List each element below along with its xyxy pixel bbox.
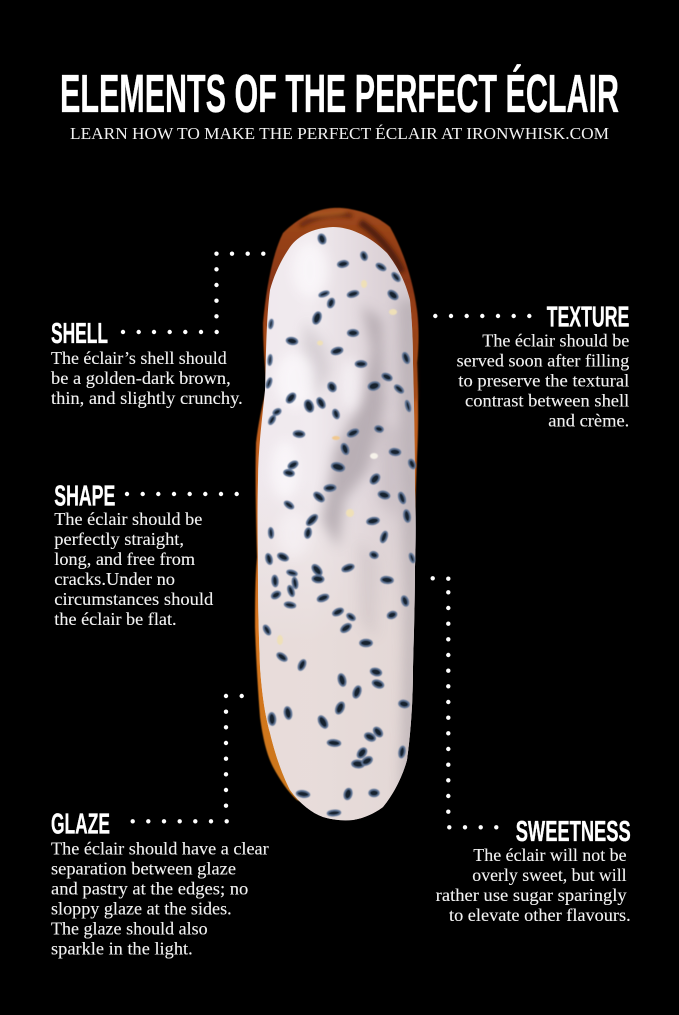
text: glaze description: The glaze should also [51, 918, 208, 938]
éclair glaze [258, 227, 416, 820]
panel: shape [54, 481, 213, 629]
text: shell description: thin, and slightly crunchy. [51, 388, 243, 408]
text: texture description [457, 331, 629, 431]
text: shell description [51, 348, 243, 408]
text: sweetness description: The éclair will not be [473, 845, 627, 865]
heading: shape: SHAPE [54, 481, 115, 513]
pale sesame flecks [277, 280, 397, 645]
dotted connector: glaze [130, 694, 244, 824]
text: shape description [54, 509, 213, 629]
shell crust texture [300, 212, 415, 400]
panel: sweetness [436, 816, 631, 925]
text: shell description: The éclair’s shell should [51, 348, 227, 368]
text: sweetness description: to elevate other flavours. [449, 905, 631, 925]
subtitle: LEARN HOW TO MAKE THE PERFECT ÉCLAIR AT IRONWHISK.COM [70, 124, 609, 143]
text: glaze description: sparkle in the light. [51, 938, 193, 958]
dotted connector: sweetness [430, 576, 498, 830]
text: shape description: The éclair should be [54, 509, 202, 529]
text: texture description: The éclair should be [482, 331, 629, 351]
text: shape description: circumstances should [54, 589, 213, 609]
text: glaze description: separation between glaze [51, 858, 236, 878]
heading: shell: SHELL [51, 318, 108, 350]
éclair illustration [250, 208, 425, 830]
dotted connector: texture [433, 314, 532, 318]
text: texture description: to preserve the textural [458, 371, 629, 391]
panel: glaze [51, 808, 269, 958]
text: shape description: cracks.Under no [54, 569, 175, 589]
panel: texture [457, 301, 629, 431]
text: texture description: served soon after filling [457, 351, 629, 371]
heading: glaze: GLAZE [51, 808, 110, 840]
text: glaze description: and pastry at the edges; no [51, 878, 248, 898]
text: sweetness description: rather use sugar sparingly [436, 885, 627, 905]
text: glaze description: The éclair should have a clear [51, 838, 269, 858]
éclair shell [255, 208, 418, 815]
dotted connector: shape [125, 492, 239, 496]
heading: texture: TEXTURE [547, 301, 629, 333]
sesame seeds [262, 233, 416, 816]
text: glaze description: sloppy glaze at the sides. [51, 898, 232, 918]
text: shape description: the éclair be flat. [54, 609, 177, 629]
glaze shadows [302, 300, 418, 820]
text: sweetness description [436, 845, 631, 925]
text: texture description: contrast between shell [465, 391, 629, 411]
dotted connector: shell [121, 252, 265, 334]
text: texture description: and crème. [548, 411, 629, 431]
text: shell description: be a golden-dark brown, [51, 368, 231, 388]
glaze highlights [271, 242, 360, 559]
text: shape description: long, and free from [54, 549, 195, 569]
text: glaze description [51, 838, 269, 958]
panel: shell [51, 318, 243, 408]
text: shape description: perfectly straight, [54, 529, 184, 549]
text: sweetness description: overly sweet, but will [472, 865, 627, 885]
